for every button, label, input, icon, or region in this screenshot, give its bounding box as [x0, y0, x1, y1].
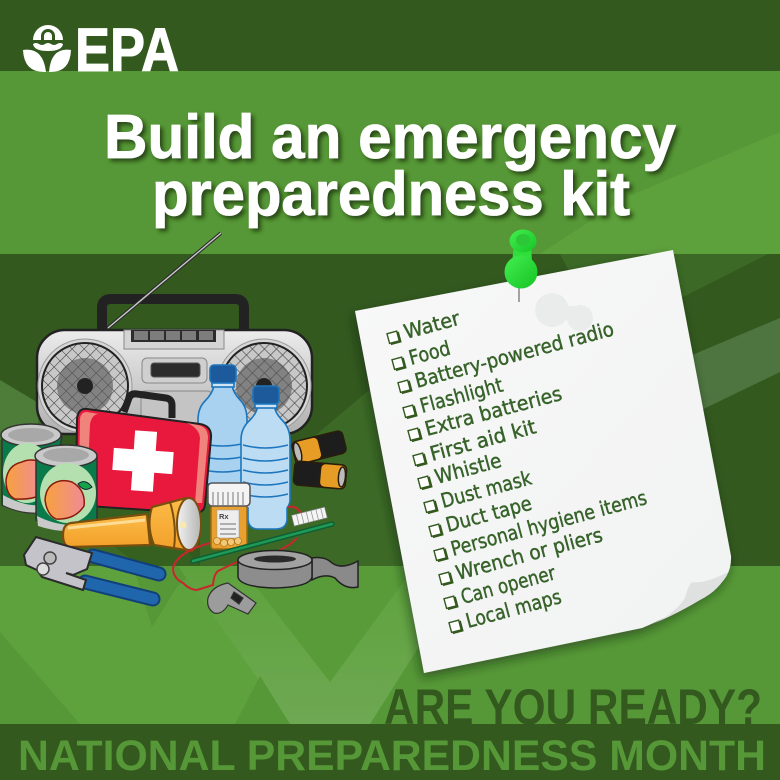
checklist items: Dust mask	[438, 465, 534, 513]
checklist items: Personal hygiene items	[448, 485, 649, 561]
checklist items: Duct tape	[443, 491, 534, 537]
title	[104, 103, 676, 229]
checklist items: Can opener	[458, 560, 559, 609]
icon: toothbrush	[193, 507, 332, 561]
checklist items: First aid kit	[427, 414, 539, 466]
illustration: emergency kit items	[1, 233, 358, 614]
checklist items: Wrench or pliers	[453, 523, 605, 585]
title: Build an emergency	[104, 103, 676, 172]
icon: radio	[37, 233, 312, 434]
panel: paper sheet	[355, 250, 731, 673]
title: preparedness kit	[152, 160, 630, 229]
note paper checklist	[355, 230, 731, 673]
page curl	[642, 572, 728, 628]
checklist items: Battery-powered radio	[412, 317, 616, 393]
icon: batteries	[291, 430, 347, 489]
icon: EPA flower	[23, 25, 71, 72]
EPA wordmark: EPA	[75, 16, 179, 84]
checklist items: Food	[406, 336, 453, 370]
icon: flashlight	[63, 498, 201, 551]
icon: pill bottle: Rx	[219, 512, 229, 521]
icon: duct tape	[238, 550, 358, 588]
icon: white cross	[111, 429, 175, 493]
EPA logo	[23, 16, 179, 84]
icon: whistle	[208, 583, 256, 614]
icon: pill bottle	[208, 483, 250, 549]
icon: can back	[1, 424, 62, 513]
icon: can front	[35, 445, 97, 531]
icon: water bottle back	[198, 365, 247, 490]
icon: first aid kit	[76, 394, 211, 513]
icon: water bottle front	[241, 386, 290, 529]
checklist items: Whistle	[432, 448, 504, 489]
checklist items: Extra batteries	[422, 381, 564, 441]
checklist items	[385, 306, 649, 637]
checklist items: Local maps	[463, 584, 564, 633]
footer: national preparedness month: NATIONAL PREPAREDNESS MONTH	[18, 732, 766, 780]
checklist items: Flashlight	[417, 373, 506, 418]
checklist items: Water	[401, 306, 463, 344]
pin shadow	[535, 293, 593, 331]
icon: can opener	[24, 537, 159, 599]
icon: red cord	[173, 507, 302, 590]
icon: green push pin	[504, 230, 538, 302]
